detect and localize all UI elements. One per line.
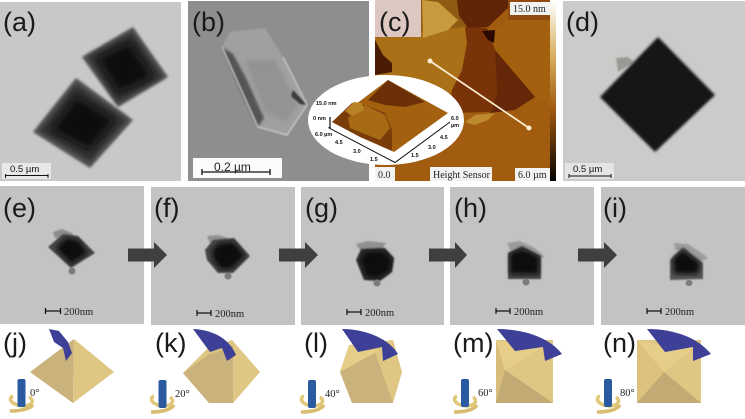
scale bar: 200nm (496, 307, 543, 318)
scale bar: 200nm: 200nm (514, 307, 543, 318)
tag: 15.0 nm (510, 2, 550, 15)
scale bar: 200nm (347, 308, 394, 319)
label: (l): (l) (304, 328, 328, 358)
scale bar: 200nm: 200nm (365, 308, 394, 319)
rotation icon 60°: 60° (478, 388, 493, 399)
inset axes and tick labels: 1.5 (411, 153, 419, 159)
panel: (h) tilt 60° micrograph (450, 187, 594, 325)
tag: 15.0 nm: 15.0 nm (513, 4, 546, 15)
rotation icon 40°: 40° (325, 389, 340, 400)
inset axes and tick labels: µm (451, 123, 459, 129)
scale bar: 0.2 µm: 0.2 µm (214, 160, 251, 174)
rotation icon 20°: 20° (175, 389, 190, 400)
tag: 0.0: 0.0 (378, 170, 390, 181)
panel: (i) tilt 80° micrograph (601, 187, 745, 325)
tag: 6.0 µm: 6.0 µm (518, 170, 547, 181)
blue tip (647, 329, 711, 361)
panel: (n) model at 80° (597, 328, 711, 412)
tag: Height Sensor: Height Sensor (433, 170, 491, 181)
label: (j): (j) (3, 328, 27, 358)
inset axes and tick labels: 4.5 (440, 135, 448, 141)
inset: 3D AFM surface (308, 75, 464, 165)
scale bar: 0.5 µm: 0.5 µm (573, 164, 602, 175)
label: (f): (f) (154, 193, 179, 223)
label: (k): (k) (155, 328, 186, 358)
scale bar: 0.5 µm: 0.5 µm (10, 164, 39, 175)
octahedron model (183, 340, 260, 403)
scale bar: 0.5 µm (565, 163, 614, 179)
panel: (g) tilt 40° micrograph (301, 187, 444, 325)
scale bar: 0.5 µm (2, 163, 51, 179)
label: (d): (d) (566, 7, 599, 37)
inset axes and tick labels: 3.0 (353, 149, 361, 155)
inset axes and tick labels: 4.5 (335, 140, 343, 146)
label: (i): (i) (603, 193, 627, 223)
colour scale bar (550, 1, 556, 181)
octahedron model (340, 340, 402, 403)
inset axes and tick labels: 3.0 (428, 145, 436, 151)
panel: (j) model at 0° (3, 328, 114, 411)
panel: (e) tilt 0° micrograph (0, 186, 144, 324)
panel: (k) model at 20° (151, 328, 260, 412)
octahedron model (637, 340, 701, 403)
blue tip (49, 329, 72, 361)
inset axes and tick labels (313, 101, 459, 163)
rotation icon 80°: 80° (620, 388, 635, 399)
profile line (428, 58, 532, 130)
inset axes and tick labels: 1.5 (370, 157, 378, 163)
octahedron model (30, 339, 74, 403)
panel: (c) AFM height map (375, 0, 550, 181)
panel: (b) TEM micrograph of thin plate (188, 1, 369, 181)
label: (g): (g) (305, 193, 338, 223)
panel: (l) model at 40° (301, 328, 402, 412)
label: (c) (375, 0, 421, 37)
label: (b): (b) (192, 7, 225, 37)
panel: (m) model at 60° (453, 328, 562, 412)
panel: (d) TEM micrograph of single crystal (563, 1, 745, 181)
label: (c): (c) (379, 7, 410, 37)
tag: 6.0 µm (515, 168, 550, 181)
label: (h): (h) (454, 193, 487, 223)
inset axes and tick labels: 0 nm (313, 116, 326, 122)
scale bar: 200nm: 200nm (215, 309, 244, 320)
inset axes and tick labels: 6.0 (451, 116, 459, 122)
scale bar: 200nm (647, 307, 694, 318)
inset axes and tick labels: 6.0 µm (315, 132, 332, 138)
panel: (f) tilt 20° micrograph (151, 187, 295, 325)
arrow: g to h (429, 242, 467, 268)
blue tip (342, 329, 398, 361)
tag: 0.0 (375, 167, 395, 181)
label: (a): (a) (3, 7, 36, 37)
scale bar: 200nm: 200nm (64, 307, 93, 318)
label: (m): (m) (453, 328, 493, 358)
arrow: h to i (578, 242, 617, 268)
label: (n): (n) (603, 328, 636, 358)
scale bar: 200nm (197, 309, 244, 320)
inset axes and tick labels: 15.0 nm (316, 101, 337, 107)
rotation icon 0°: 0° (30, 388, 39, 399)
arrow: f to g (279, 242, 318, 268)
blue tip (193, 329, 236, 361)
blue tip (497, 329, 562, 361)
scale bar: 0.2 µm (193, 158, 282, 178)
scale bar: 200nm (46, 307, 93, 318)
panel: (a) TEM micrograph of two crystals (0, 2, 181, 181)
arrow: e to f (128, 242, 167, 268)
label: (e): (e) (3, 193, 36, 223)
scale bar: 200nm: 200nm (665, 307, 694, 318)
octahedron model (496, 340, 553, 403)
